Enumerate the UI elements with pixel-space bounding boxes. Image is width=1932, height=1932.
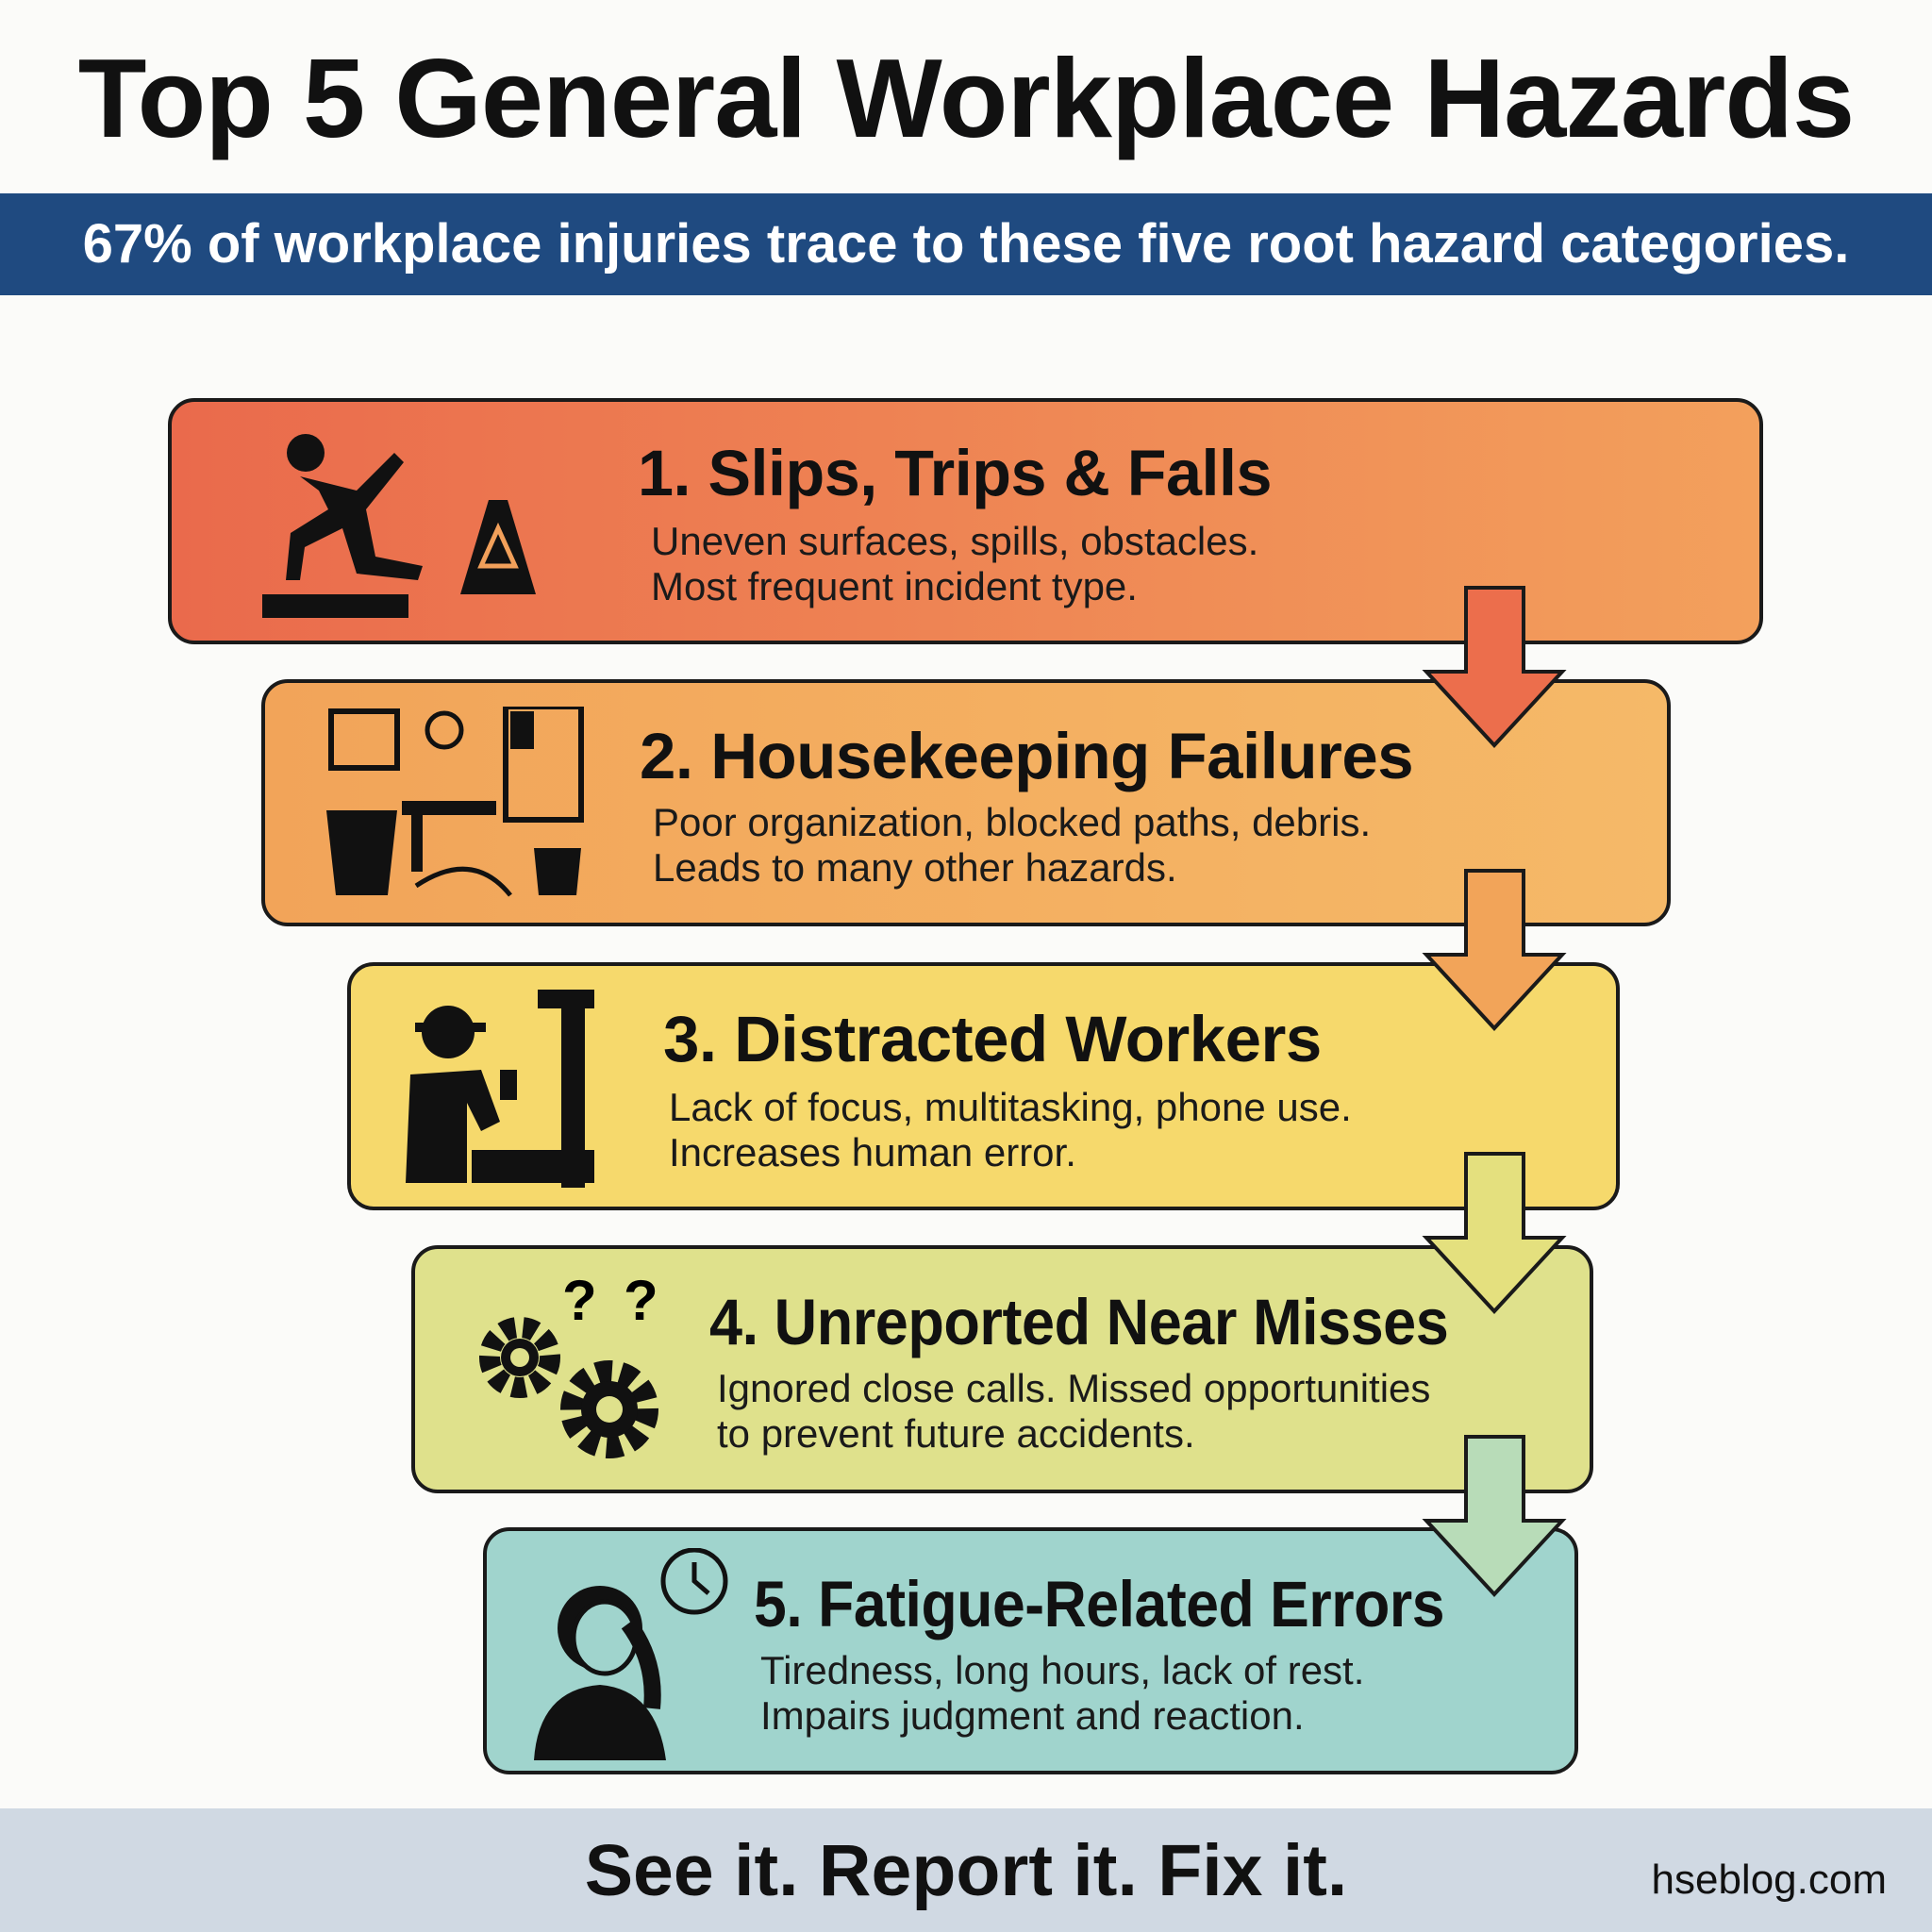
- desc 4: Ignored close calls. Missed opportunities: [717, 1366, 1430, 1410]
- icon: slipping person: [262, 434, 536, 618]
- heading 5: 5. Fatigue-Related Errors: [754, 1568, 1444, 1641]
- icon: tired worker with clock: [534, 1548, 728, 1760]
- subtitle band: [0, 193, 1932, 295]
- desc 2: Leads to many other hazards.: [653, 845, 1177, 890]
- card 3: distracted: [347, 962, 1620, 1210]
- desc 2: Poor organization, blocked paths, debris.: [653, 800, 1371, 844]
- card 4: near misses: [411, 1245, 1593, 1493]
- heading 4: 4. Unreported Near Misses: [709, 1286, 1448, 1358]
- desc 3: Increases human error.: [669, 1130, 1076, 1174]
- desc 3: Lack of focus, multitasking, phone use.: [669, 1085, 1352, 1129]
- desc 4: [717, 1366, 1430, 1456]
- desc 1: [651, 519, 1258, 608]
- desc 3: [669, 1085, 1352, 1174]
- desc 1: Most frequent incident type.: [651, 564, 1138, 608]
- footer slogan: See it. Report it. Fix it.: [585, 1830, 1347, 1911]
- title: Top 5 General Workplace Hazards: [78, 36, 1854, 161]
- subtitle band: 67% of workplace injuries trace to these five root hazard categories.: [83, 213, 1849, 275]
- icon: distracted worker: [406, 990, 594, 1188]
- desc 5: [760, 1648, 1364, 1738]
- heading 2: 2. Housekeeping Failures: [640, 720, 1413, 792]
- card 2: housekeeping: [261, 679, 1671, 926]
- desc 4: to prevent future accidents.: [717, 1411, 1195, 1456]
- desc 5: Tiredness, long hours, lack of rest.: [760, 1648, 1364, 1692]
- arrow 1: [1426, 588, 1562, 745]
- card 1: slips: [168, 398, 1763, 644]
- icon: cluttered office: [326, 707, 584, 896]
- icon: gears with question marks: [479, 1277, 658, 1458]
- heading 3: 3. Distracted Workers: [663, 1003, 1322, 1075]
- heading 1: 1. Slips, Trips & Falls: [638, 437, 1272, 509]
- desc 1: Uneven surfaces, spills, obstacles.: [651, 519, 1258, 563]
- arrow 3: [1426, 1154, 1562, 1311]
- card 5: fatigue: [483, 1527, 1578, 1774]
- arrow 4: [1426, 1437, 1562, 1594]
- arrows: [1423, 586, 1566, 1597]
- arrow 2: [1426, 871, 1562, 1028]
- desc 2: [653, 800, 1371, 890]
- desc 5: Impairs judgment and reaction.: [760, 1693, 1305, 1738]
- footer band: [0, 1808, 1932, 1932]
- footer brand: hseblog.com: [1652, 1857, 1887, 1903]
